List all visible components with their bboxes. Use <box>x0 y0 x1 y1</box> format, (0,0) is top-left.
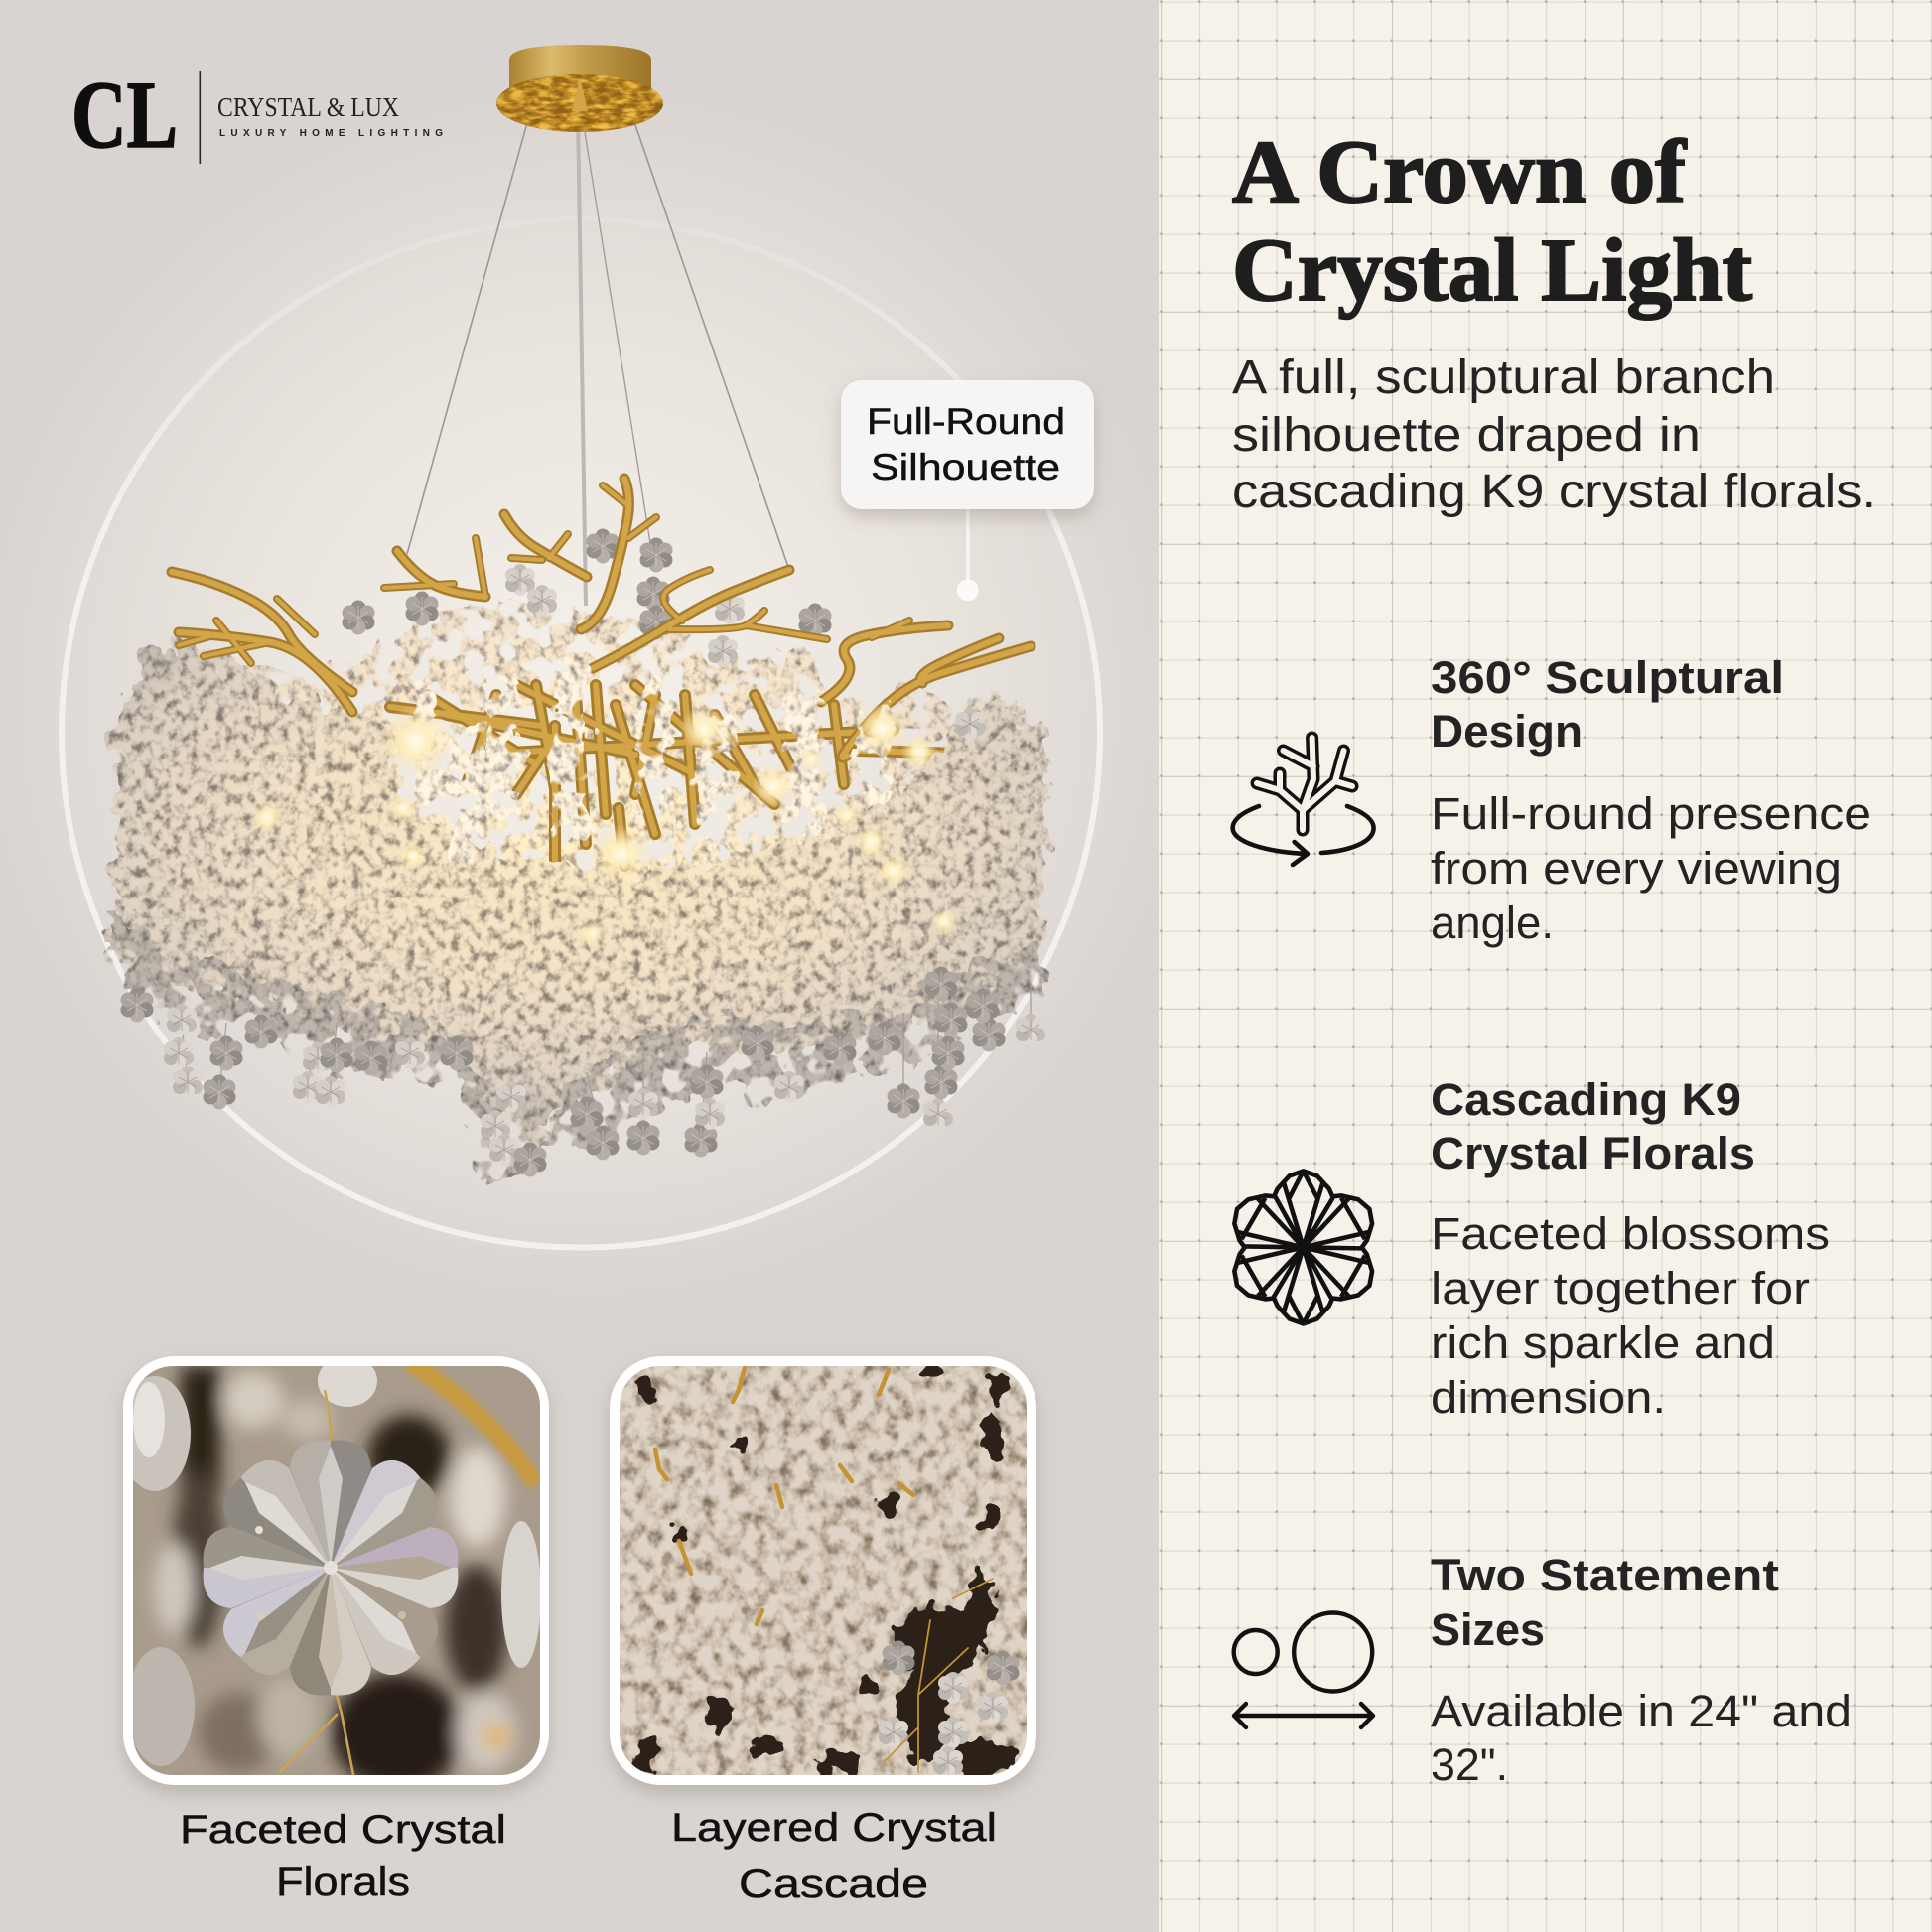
icon: branch with 360 rotation <box>1233 738 1374 865</box>
icon: faceted crystal flower <box>1222 1171 1384 1323</box>
feature: two statement sizes: Two Statement <box>1431 1550 1779 1600</box>
caption: faceted crystal florals: Florals <box>276 1861 410 1904</box>
dark gaps <box>633 1362 1018 1776</box>
feature: 360 sculptural design <box>1431 652 1871 948</box>
dense crystal mass <box>109 645 1045 1122</box>
ceiling canopy <box>496 45 663 132</box>
caption: faceted crystal florals: Faceted Crystal <box>180 1808 506 1852</box>
title <box>1232 123 1752 320</box>
chandelier suspension wires <box>407 102 788 606</box>
subtitle: A full, sculptural branch <box>1232 351 1775 404</box>
callout: full-round silhouette <box>841 380 1094 601</box>
feature: cascading k9 crystal florals: rich sparkle and <box>1431 1317 1775 1368</box>
subtitle <box>1232 351 1876 518</box>
halo ring <box>62 218 1100 1247</box>
feature: 360 sculptural design: Full-round presence <box>1431 788 1871 839</box>
logo: LUXURY HOME LIGHTING <box>219 128 443 139</box>
feature: cascading k9 crystal florals: Cascading K9 <box>1431 1074 1741 1125</box>
feature: 360 sculptural design: Design <box>1431 706 1583 757</box>
logo: CL <box>71 62 178 168</box>
panel: right grid-paper background <box>1159 0 1932 1932</box>
feature: cascading k9 crystal florals: layer together for <box>1431 1263 1810 1313</box>
title: A Crown of <box>1232 123 1687 221</box>
caption: layered crystal cascade: Cascade <box>739 1863 928 1906</box>
feature: 360 sculptural design: angle. <box>1431 897 1554 948</box>
feature: two statement sizes <box>1431 1550 1852 1790</box>
panel: left product background <box>0 0 1160 1932</box>
crystal columns over the core <box>427 675 874 854</box>
feature: two statement sizes: Sizes <box>1431 1604 1545 1655</box>
callout: full-round silhouette: Silhouette <box>871 447 1060 487</box>
feature: cascading k9 crystal florals <box>1431 1074 1830 1423</box>
feature: cascading k9 crystal florals: dimension. <box>1431 1372 1666 1423</box>
gold branches <box>172 479 1031 758</box>
logo <box>71 62 443 168</box>
feature: two statement sizes: 32". <box>1431 1739 1508 1790</box>
detail card: faceted crystal florals <box>119 1355 549 1792</box>
logo: CRYSTAL & LUX <box>217 92 399 122</box>
gold accents <box>655 1368 993 1772</box>
subtitle: cascading K9 crystal florals. <box>1232 466 1876 518</box>
caption: layered crystal cascade <box>671 1806 997 1906</box>
glowing lights <box>250 703 958 947</box>
caption: layered crystal cascade: Layered Crystal <box>671 1806 997 1850</box>
callout: full-round silhouette: Full-Round <box>867 401 1065 442</box>
feature: cascading k9 crystal florals: Faceted blossoms <box>1431 1208 1830 1259</box>
feature: 360 sculptural design: from every viewing <box>1431 843 1842 894</box>
detail card: layered crystal cascade <box>610 1356 1036 1785</box>
silvery lower fringe <box>109 913 1044 1181</box>
faceted crystal blossom <box>204 1441 458 1695</box>
feature: cascading k9 crystal florals: Crystal Florals <box>1431 1128 1755 1178</box>
gold core behind crystals <box>390 685 999 881</box>
subtitle: silhouette draped in <box>1232 409 1701 462</box>
loose outer crystals <box>112 601 1045 1169</box>
blossoms over the dark gaps <box>879 1640 1019 1778</box>
feature: 360 sculptural design: 360° Sculptural <box>1431 652 1784 703</box>
icon: two circle sizes with arrow <box>1234 1612 1373 1727</box>
title: Crystal Light <box>1232 221 1752 320</box>
chandelier <box>109 479 1045 1181</box>
feature: two statement sizes: Available in 24" and <box>1431 1686 1852 1736</box>
hanging crystal blossoms <box>121 528 1045 1177</box>
caption: faceted crystal florals <box>180 1808 506 1904</box>
